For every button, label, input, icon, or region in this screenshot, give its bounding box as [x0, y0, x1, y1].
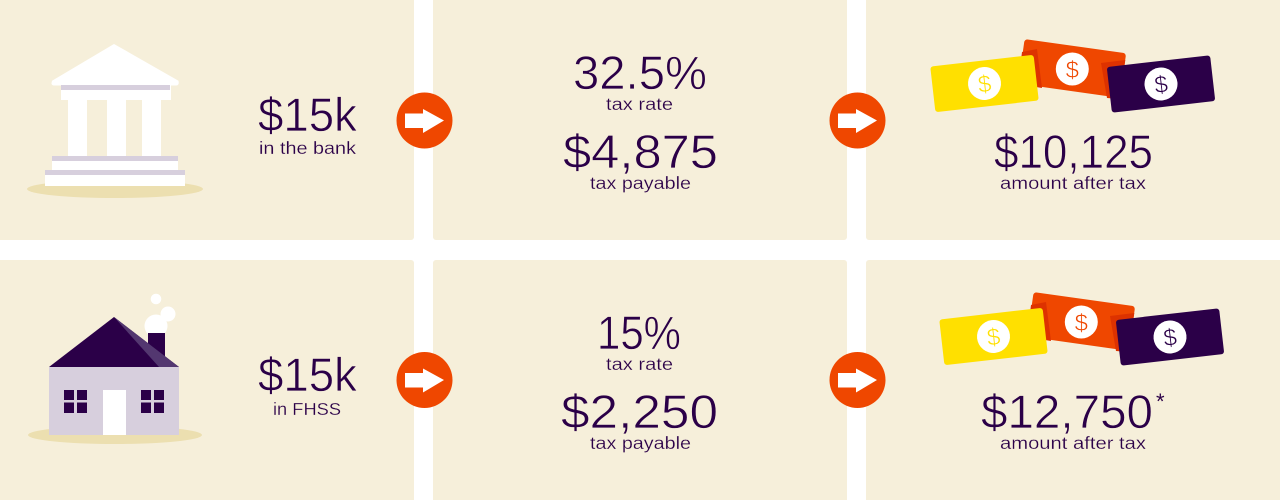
label: amount after tax: amount after tax	[1000, 433, 1146, 453]
label: tax rate: tax rate	[606, 94, 673, 114]
panel: bank after tax	[866, 0, 1280, 240]
icon: banknotes: $	[976, 70, 993, 99]
label: amount after tax: amount after tax	[1000, 173, 1146, 193]
amount: $2,250: $2,250	[561, 385, 718, 438]
arrow: FHSS savings to tax	[396, 352, 452, 408]
icon: banknotes: $	[1075, 310, 1088, 337]
arrow: bank savings to tax	[396, 92, 452, 148]
icon: house	[28, 294, 202, 444]
label: in the bank: in the bank	[259, 138, 356, 158]
panel: FHSS savings	[0, 260, 414, 500]
amount: $4,875: $4,875	[563, 125, 718, 178]
amount: $15k: $15k	[258, 88, 357, 141]
amount: $12,750: $12,750	[981, 385, 1153, 438]
icon: banknotes: $	[1153, 71, 1169, 99]
icon: banknotes	[930, 39, 1215, 113]
arrow: FHSS tax to after tax	[830, 352, 886, 408]
panel: FHSS tax	[433, 260, 847, 500]
panel: FHSS after tax	[866, 260, 1280, 500]
icon: banknotes: $	[1066, 57, 1079, 84]
rate: 32.5%: 32.5%	[573, 46, 707, 99]
footnote asterisk: *	[1156, 389, 1165, 414]
icon: banknotes: $	[1162, 324, 1178, 352]
arrow: bank tax to after tax	[830, 92, 886, 148]
panel: bank tax	[433, 0, 847, 240]
icon: bank building	[27, 44, 203, 198]
label: tax payable: tax payable	[590, 173, 691, 193]
label: in FHSS: in FHSS	[273, 399, 341, 419]
label: tax rate: tax rate	[606, 354, 673, 374]
panel: bank savings	[0, 0, 414, 240]
label: tax payable: tax payable	[590, 433, 691, 453]
icon: banknotes: $	[985, 323, 1002, 352]
icon: banknotes	[939, 292, 1224, 366]
amount: $10,125: $10,125	[994, 125, 1153, 178]
amount: $15k: $15k	[258, 348, 357, 401]
rate: 15%: 15%	[597, 306, 681, 359]
